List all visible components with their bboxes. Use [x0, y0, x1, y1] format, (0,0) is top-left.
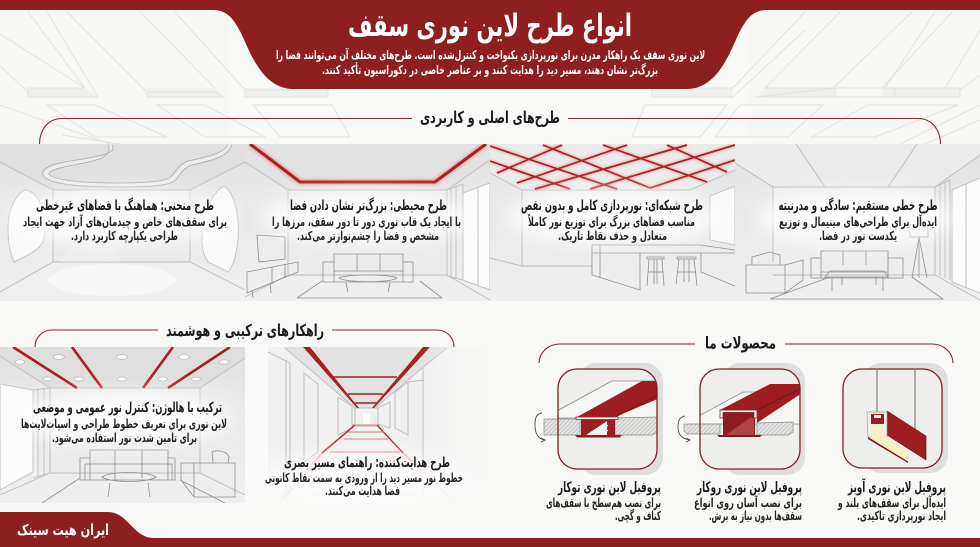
- text: straight line design: یکدست نور در فضا.: [819, 228, 897, 243]
- text: grid design: مناسب فضاهای بزرگ برای توزیع نور کاملاً: [528, 213, 695, 229]
- icon: grid red lights: [490, 145, 735, 189]
- text: curved design: طراحی یکپارچه کاربرد دارد.: [71, 228, 178, 243]
- text: guiding design: فضا هدایت می‌کنند.: [325, 483, 400, 498]
- panel: grid design: [490, 144, 735, 301]
- product card: recessed profile: [535, 363, 663, 475]
- panel: guiding corridor design: [266, 347, 462, 498]
- icon: kitchen counter and stools: [592, 245, 735, 290]
- product text: recessed: برای نصب هم‌سطح با سقف‌های: [546, 495, 661, 510]
- product text: recessed: [546, 480, 661, 523]
- product text: surface: پروفیل لاین نوری روکار: [696, 480, 802, 496]
- icon: pendant profile drawing: [867, 370, 926, 463]
- section heading: combined solutions: [35, 321, 454, 347]
- text: halogen combination: برای تامین شدت نور استفاده می‌شود.: [52, 430, 197, 445]
- product text: pendant: [837, 478, 946, 523]
- section heading: our products: محصولات ما: [705, 334, 776, 354]
- text: perimeter design: طرح محیطی: بزرگ‌تر نشان دادن فضا: [290, 197, 447, 214]
- icon: floor guide lights: [283, 424, 447, 498]
- text: grid design: متعادل و حذف نقاط تاریک.: [558, 228, 667, 243]
- product card: surface profile: [678, 363, 805, 475]
- text: grid design: طرح شبکه‌ای: نورپردازی کامل و بدون نقص: [521, 198, 703, 214]
- text: guiding design: طرح هدایت‌کننده: راهنمای مسیر بصری: [284, 455, 450, 471]
- icon: lounge furniture: [746, 227, 943, 299]
- text: perimeter design: [272, 197, 461, 243]
- section heading: our products: [539, 334, 953, 363]
- section heading: combined solutions: راهکارهای ترکیبی و هوشمند: [166, 321, 324, 341]
- text: perimeter design: مشخص و فضا را چشم‌نوازتر می‌کند.: [297, 228, 439, 243]
- icon: tv and cabinet: [247, 235, 298, 298]
- header banner: [0, 0, 980, 89]
- icon: recessed profile drawing: [535, 381, 660, 442]
- product text: recessed: پروفیل لاین نوری توکار: [557, 480, 661, 496]
- text: perimeter design: با ایجاد یک قاب نوری دور تا دور سقف، مرزها را: [272, 214, 461, 229]
- text: straight line design: [778, 197, 938, 243]
- product card: pendant profile: [843, 363, 948, 473]
- ceiling coffer background, left: [0, 10, 350, 144]
- text: halogen combination: [21, 400, 227, 445]
- brand name: ایران هیت سینک: [17, 521, 109, 539]
- text: curved design: طرح منحنی: هماهنگ با فضاهای غیرخطی: [36, 197, 214, 214]
- text: curved design: برای سقف‌های خاص و چیدمان‌های آزاد جهت ایجاد: [23, 214, 227, 229]
- text: grid design: [521, 198, 703, 243]
- title: انواع طرح لاین نوری سقف: [348, 8, 632, 44]
- text: guiding design: [265, 455, 463, 498]
- intro text: [276, 47, 705, 78]
- icon: sofa and table: [297, 254, 442, 298]
- panel: straight line design: [735, 144, 980, 301]
- icon: perimeter red light: [250, 144, 486, 182]
- text: halogen combination: لاین نوری برای تعریف خطوط طراحی و اسپات‌لایت‌ها: [21, 416, 227, 431]
- panel: perimeter design: [245, 144, 490, 301]
- ceiling coffer background, right: [632, 10, 980, 144]
- icon: halogen downlights: [15, 355, 229, 381]
- text: curved design: [23, 197, 227, 243]
- intro text: بزرگ‌تر نشان دهند، مسیر دید را هدایت کنند و بر عناصر خاصی در دکوراسیون تأکید کنند.: [322, 62, 658, 78]
- footer band and brand tab: [0, 512, 980, 547]
- section heading: main designs: طرح‌های اصلی و کاربردی: [420, 108, 560, 128]
- icon: curved ceiling line: [42, 145, 232, 187]
- product text: surface: برای نصب آسان روی انواع: [694, 495, 802, 510]
- text: halogen combination: ترکیب با هالوژن: کنترل نور عمومی و موضعی: [33, 400, 222, 416]
- icon: surface profile drawing: [678, 384, 802, 442]
- product text: surface: [694, 480, 802, 523]
- panel: curved design: [0, 144, 245, 301]
- panel: combination with halogen: [0, 347, 245, 503]
- product text: surface: سقف‌ها بدون نیاز به برش.: [709, 508, 802, 523]
- product text: recessed: کناف و گچی.: [615, 508, 661, 523]
- text: guiding design: خطوط نور مسیر دید را از ورودی به سمت نقاط کانونی: [265, 470, 463, 485]
- section heading: main designs: [40, 108, 940, 144]
- icon: red linear lights: [13, 347, 230, 388]
- intro text: لاین نوری سقف یک راهکار مدرن برای نورپردازی یکنواخت و کنترل‌شده است. طرح‌های مختلف آن می‌توانند فضا را: [276, 47, 705, 63]
- icon: ceiling guide lights: [303, 347, 430, 408]
- icon: sofa, armchair, table: [42, 450, 235, 503]
